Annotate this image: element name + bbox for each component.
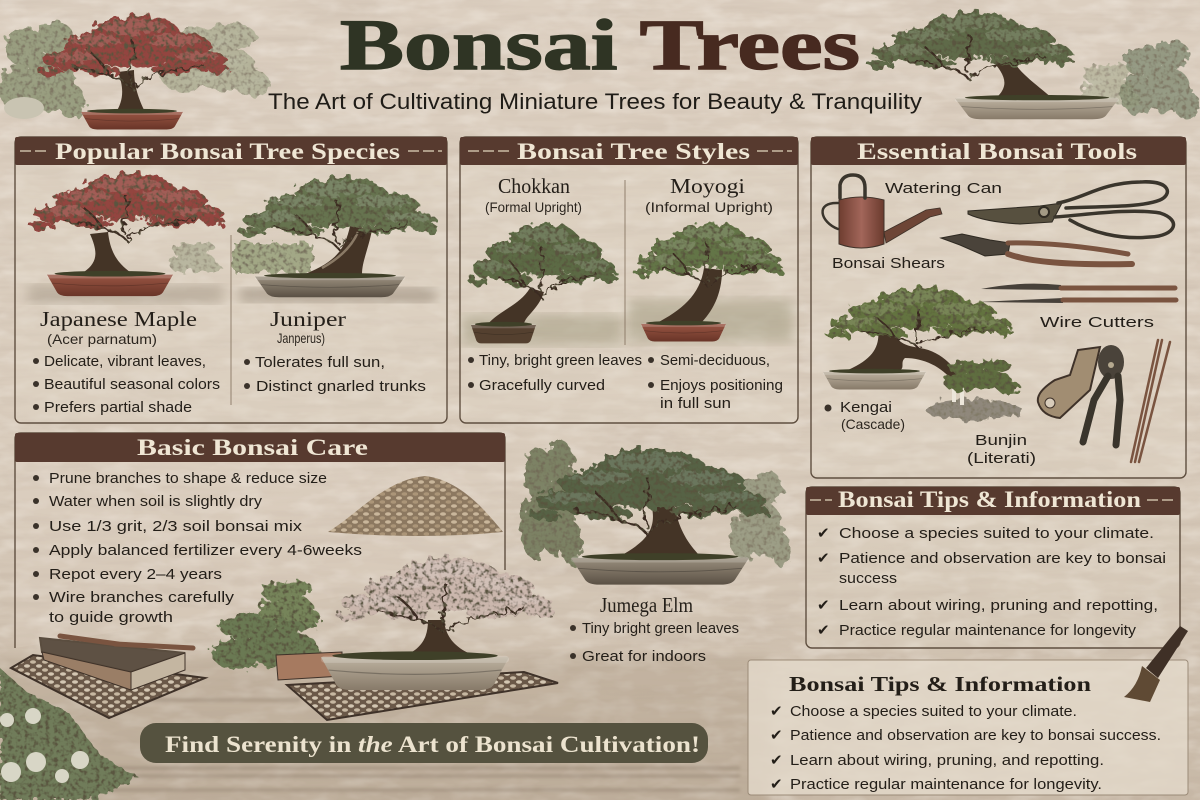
style: Chokkan xyxy=(462,174,622,345)
tips list: ✔ xyxy=(817,525,830,542)
text: juniper: Tolerates full sun, xyxy=(255,354,385,371)
style notes: in full sun xyxy=(660,395,731,412)
lower tips list: ✔ xyxy=(770,776,783,793)
heading: tips: Bonsai Tips & Information xyxy=(838,487,1141,512)
subtitle: The Art of Cultivating Miniature Trees for Beauty & Tranquility xyxy=(268,89,922,114)
panel: popular species xyxy=(15,137,447,423)
tips list: Patience and observation are key to bonsai xyxy=(839,550,1166,567)
icon: wire cutters xyxy=(1038,345,1124,445)
label: wire cutters: Wire Cutters xyxy=(1040,314,1154,331)
text: juniper: Juniper xyxy=(270,307,346,331)
care list: Wire branches carefully xyxy=(49,589,235,606)
style: Moyogi: (Informal Upright) xyxy=(645,199,773,215)
care list: to guide growth xyxy=(49,609,173,626)
banner: Find Serenity in the Art of Bonsai Cultivation! xyxy=(165,732,700,757)
style notes xyxy=(468,352,783,412)
lower tips list: Learn about wiring, pruning, and repotting. xyxy=(790,752,1104,769)
tips list: Learn about wiring, pruning and repotting, xyxy=(839,597,1158,614)
icon: pruning knives xyxy=(978,284,1176,303)
lower tips list: ✔ xyxy=(770,727,783,744)
label: watering can: Watering Can xyxy=(885,180,1002,197)
tips list: ✔ xyxy=(817,622,830,639)
text: Jumega elm: Great for indoors xyxy=(582,648,706,665)
text: Japanese maple: Delicate, vibrant leaves, xyxy=(44,353,206,370)
tips list: success xyxy=(839,570,897,587)
heading: essential tools xyxy=(811,137,1186,165)
tips list xyxy=(817,525,1166,639)
style: Chokkan: Chokkan xyxy=(498,174,570,198)
top-right green bonsai illustration xyxy=(866,13,1200,119)
label: Kengai: (Cascade) xyxy=(841,416,905,432)
heading: popular species xyxy=(15,137,447,165)
icon: bonsai shears xyxy=(968,182,1173,238)
scene: flowering bonsai xyxy=(287,558,558,720)
care list: Prune branches to shape & reduce size xyxy=(49,470,327,487)
heading: tree styles: Bonsai Tree Styles xyxy=(517,139,750,164)
heading: basic care: Basic Bonsai Care xyxy=(137,435,368,460)
panel: tips and information lower card xyxy=(748,660,1188,795)
style notes: Semi-deciduous, xyxy=(660,352,770,369)
heading: tree styles xyxy=(460,137,798,165)
icon: long pliers xyxy=(941,234,1132,264)
text: juniper xyxy=(244,307,426,395)
title: Bonsai Trees xyxy=(340,5,860,85)
label: Kengai xyxy=(824,399,905,432)
heading: basic care xyxy=(15,433,505,462)
style notes: Enjoys positioning xyxy=(660,377,783,394)
text: Japanese maple xyxy=(33,307,220,416)
text: Japanese maple: Japanese Maple xyxy=(40,307,197,331)
lower tips list: ✔ xyxy=(770,703,783,720)
icon: bamboo sticks xyxy=(1131,340,1170,462)
care list: Repot every 2–4 years xyxy=(49,566,222,583)
scene: herb plant and box xyxy=(212,580,342,680)
illustration: Japanese maple xyxy=(28,174,226,303)
panel: tips and information xyxy=(806,487,1180,648)
care list xyxy=(33,470,362,626)
scene: tool trays xyxy=(11,636,205,718)
style notes: Tiny, bright green leaves xyxy=(479,352,642,369)
care list: Apply balanced fertilizer every 4-6weeks xyxy=(49,542,362,559)
label: Kengai: Kengai xyxy=(840,399,892,416)
tips list: Practice regular maintenance for longevity xyxy=(839,622,1137,639)
style: Moyogi: Moyogi xyxy=(670,174,745,198)
panel: basic care xyxy=(15,433,505,648)
tips list: ✔ xyxy=(817,597,830,614)
style notes: Gracefully curved xyxy=(479,377,605,394)
label: bonsai shears: Bonsai Shears xyxy=(832,255,945,272)
care list: Use 1/3 grit, 2/3 soil bonsai mix xyxy=(49,518,303,535)
banner xyxy=(140,723,708,763)
text: Japanese maple: (Acer parnatum) xyxy=(47,331,157,347)
lower tips list: Practice regular maintenance for longevity. xyxy=(790,776,1102,793)
heading: lower tips: Bonsai Tips & Information xyxy=(789,672,1091,696)
heading: tips xyxy=(806,487,1180,515)
label: Bunjin: Bunjin xyxy=(975,432,1027,449)
text: Jumega elm: Tiny bright green leaves xyxy=(582,620,739,637)
label: Bunjin: (Literati) xyxy=(967,450,1036,467)
style: Moyogi xyxy=(628,174,793,342)
text: Jumega elm xyxy=(570,593,739,665)
illustration: cascade bonsai xyxy=(823,288,1022,421)
top-left red maple illustration xyxy=(0,16,270,129)
lower tips list: ✔ xyxy=(770,752,783,769)
text: Japanese maple: Beautiful seasonal colors xyxy=(44,376,220,393)
scene: flowers bottom left xyxy=(0,668,140,800)
text: juniper: Distinct gnarled trunks xyxy=(256,378,426,395)
illustration: juniper xyxy=(234,178,439,302)
style: Chokkan: (Formal Upright) xyxy=(485,199,582,215)
heading: essential tools: Essential Bonsai Tools xyxy=(857,139,1137,164)
tips list: ✔ xyxy=(817,550,830,567)
icon: brush xyxy=(1124,626,1188,702)
panel: Jumega elm xyxy=(520,440,790,665)
lower tips list xyxy=(770,703,1161,793)
text: juniper: Janperus) xyxy=(277,330,325,346)
illustration: gravel pile xyxy=(328,476,503,536)
tips list: Choose a species suited to your climate. xyxy=(839,525,1154,542)
panel: tree styles xyxy=(460,137,798,423)
icon: watering can xyxy=(823,175,942,248)
lower tips list: Patience and observation are key to bonsai success. xyxy=(790,727,1161,744)
care list: Water when soil is slightly dry xyxy=(49,493,263,510)
text: Japanese maple: Prefers partial shade xyxy=(44,399,192,416)
text: Jumega elm: Jumega Elm xyxy=(600,593,693,617)
label: Bunjin xyxy=(967,432,1036,467)
heading: popular species: Popular Bonsai Tree Species xyxy=(55,139,400,164)
lower tips list: Choose a species suited to your climate. xyxy=(790,703,1077,720)
panel: essential tools xyxy=(811,137,1186,478)
